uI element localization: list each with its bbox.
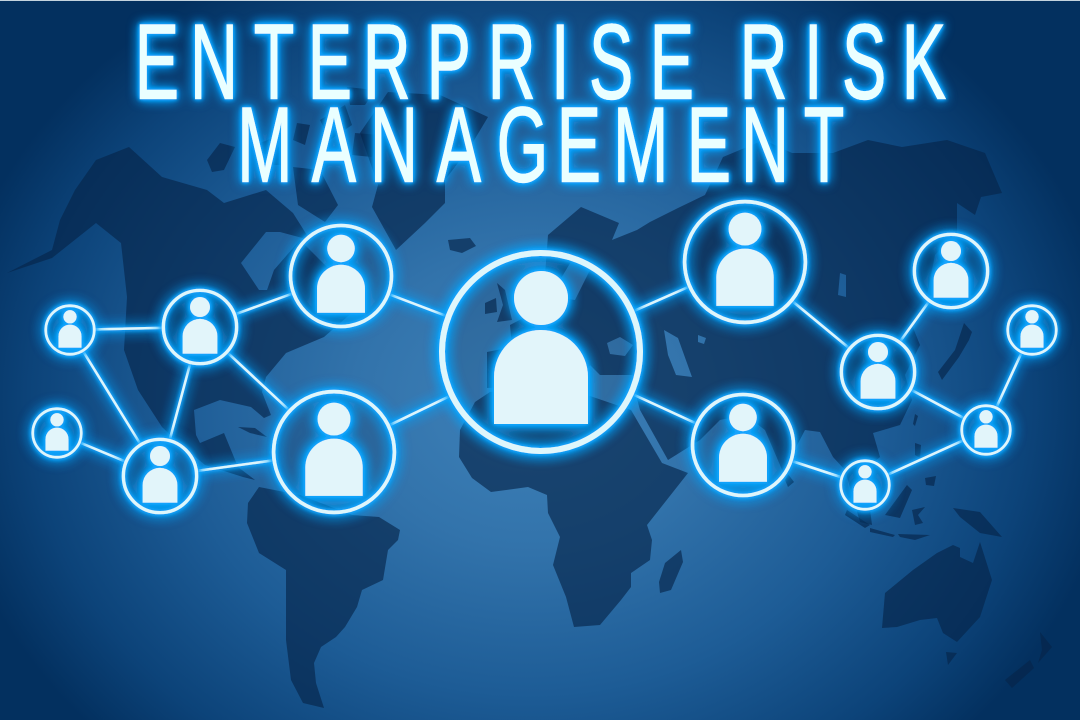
Arctic islands (207, 87, 380, 222)
node: far left lower (33, 409, 81, 457)
node: far right small (1008, 306, 1056, 354)
Greenland (360, 92, 488, 250)
title (135, 1, 946, 204)
network nodes (33, 202, 1056, 513)
Taiwan and Philippines (913, 414, 936, 486)
Sumatra and Java (845, 510, 930, 540)
node: upper right large (685, 202, 805, 322)
node: right medium centre (841, 335, 915, 409)
Tasmania (946, 652, 957, 665)
node backdrops (33, 202, 1056, 512)
node: left medium lower (123, 439, 197, 513)
title line 1: ENTERPRISE RISK (135, 1, 946, 121)
connecting lines (57, 262, 1032, 485)
Iceland (448, 238, 476, 253)
node: right small lower (962, 406, 1010, 454)
United Kingdom and Ireland (485, 283, 512, 322)
title line 2: MANAGEMENT (237, 84, 844, 204)
node: bottom right small (841, 461, 889, 509)
node: upper left large (291, 226, 391, 326)
North America (7, 147, 355, 480)
node: lower left large (274, 392, 394, 512)
Borneo (885, 485, 912, 518)
New Guinea (953, 508, 1002, 537)
Cuba (238, 427, 267, 437)
Madagascar (659, 550, 683, 593)
Australia (882, 542, 992, 642)
node: lower right large (693, 395, 793, 495)
New Zealand (1005, 632, 1052, 688)
node: far left upper (46, 306, 94, 354)
node: left medium upper (163, 290, 237, 364)
South America (247, 487, 400, 708)
node: right medium upper (914, 234, 988, 308)
Africa (459, 385, 688, 627)
Japan (938, 323, 972, 380)
Sri Lanka (785, 474, 794, 487)
Eurasia (487, 140, 1002, 525)
node: centre person (442, 253, 640, 451)
Sulawesi (912, 507, 925, 525)
